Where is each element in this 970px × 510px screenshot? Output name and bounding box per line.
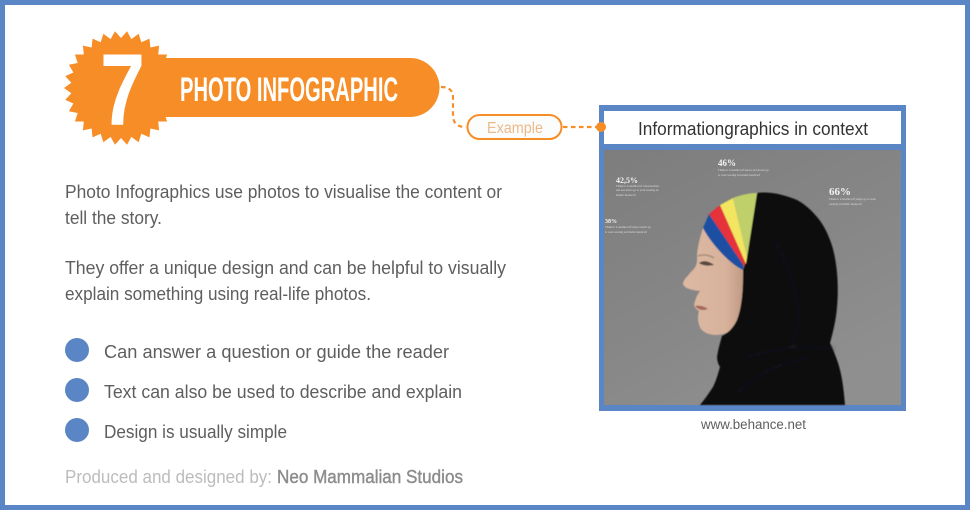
label 38%: to work wearing an Islamic headscarf: [605, 231, 647, 234]
producer credit: Neo Mammalian Studios: [277, 467, 463, 487]
label 46%: [718, 158, 770, 177]
headband: yellow: [720, 198, 747, 264]
label 46%: to work wearing an Islamic headscarf: [718, 174, 760, 177]
connector: title bar to example pill: [441, 87, 466, 127]
title text: PHOTO INFOGRAPHIC: [180, 71, 398, 109]
label 38%: 38%: [605, 219, 617, 225]
headband: red: [709, 205, 746, 266]
bullet 3: Design is usually simple: [104, 422, 287, 442]
face: [683, 225, 760, 335]
headband: blue: [703, 214, 744, 270]
connector: example pill to photo frame: [563, 126, 597, 128]
label 42.5%: Islamic headscarf: [616, 194, 636, 197]
panel title: Informationgraphics in context: [638, 118, 868, 139]
number 7: 7: [100, 33, 145, 147]
label 66%: [829, 186, 876, 206]
label 42.5%: [616, 176, 659, 197]
example pill: Example: [487, 120, 543, 137]
bullet 3: [65, 418, 287, 442]
label 46%: Thinks it is unethical if nurses and doctors go: [718, 169, 770, 172]
second paragraph: They offer a unique design and can be helpful to visually: [65, 258, 506, 278]
producer credit: Produced and designed by:: [65, 467, 272, 487]
example photo panel: [599, 105, 906, 411]
intro paragraph: [65, 182, 502, 228]
photo source: www.behance.net: [700, 417, 806, 432]
bullet list: [65, 338, 462, 442]
headband: green: [733, 193, 757, 257]
label 38%: [605, 219, 652, 234]
bullet 2: Text can also be used to describe and explain: [104, 382, 462, 402]
label 42.5%: and executives go to work wearing an: [616, 189, 659, 192]
photo background: [604, 150, 901, 405]
hijab: [700, 192, 845, 405]
lips: [695, 306, 708, 310]
label 38%: Thinks it is unethical if buses conduct go: [605, 226, 652, 229]
label 66%: wearing an Islamic headscarf: [829, 203, 862, 206]
eye: [699, 261, 714, 266]
producer credit: [65, 467, 463, 487]
label 46%: 46%: [718, 158, 736, 168]
bullet 1: Can answer a question or guide the reader: [104, 342, 449, 362]
eyebrow: [698, 255, 714, 258]
header: number badge and title bar: [64, 31, 440, 147]
connector end dot: [596, 122, 606, 132]
example pill: [468, 115, 562, 139]
frame: [599, 105, 906, 411]
starburst badge: [64, 31, 178, 145]
label 42.5%: Thinks it is unethical if schoolteachers: [616, 185, 659, 188]
panel title box: [604, 111, 901, 144]
intro paragraph: tell the story.: [65, 208, 162, 228]
title bar: [150, 58, 440, 117]
label 42.5%: 42,5%: [616, 176, 638, 185]
label 66%: 66%: [829, 186, 851, 198]
intro paragraph: Photo Infographics use photos to visualise the content or: [65, 182, 502, 202]
second paragraph: explain something using real-life photos.: [65, 284, 371, 304]
hijab folds: [735, 240, 832, 395]
label 66%: Thinks it is unethical if judges go to work: [829, 198, 876, 201]
second paragraph: [65, 258, 506, 304]
figure in profile: [683, 192, 845, 405]
